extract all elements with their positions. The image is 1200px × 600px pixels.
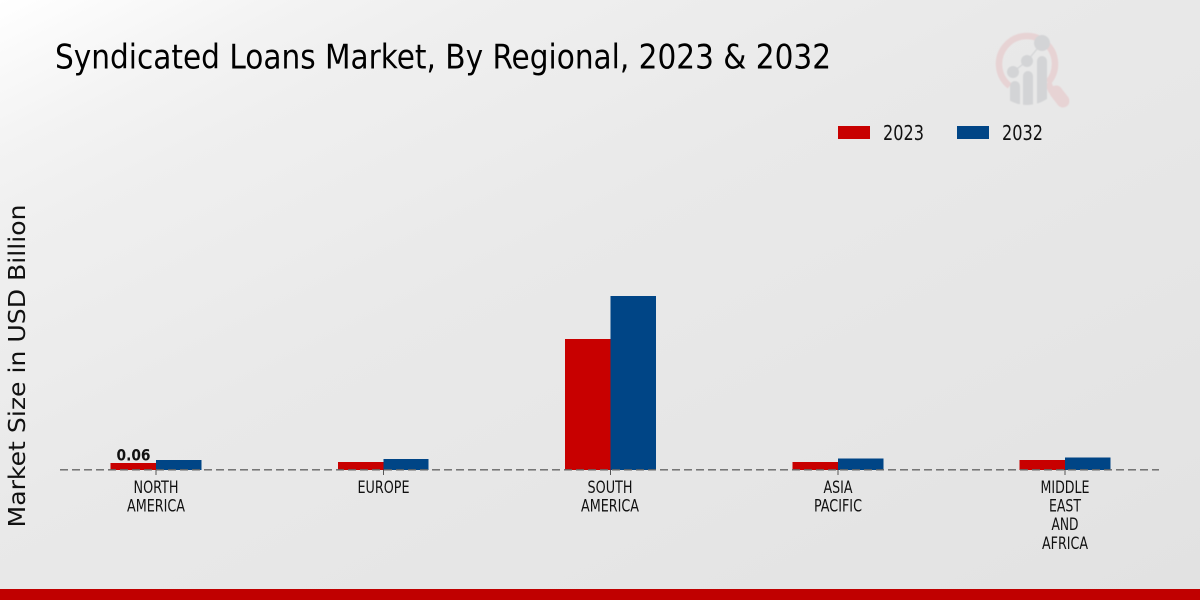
label: Middle East and Africa: EAST xyxy=(1049,496,1082,516)
y axis title: Market Size in USD Billion xyxy=(3,205,31,527)
label: North America: NORTH xyxy=(134,478,178,497)
label: Middle East and Africa: MIDDLE xyxy=(1040,478,1090,497)
bars: South America xyxy=(565,296,656,470)
bars: Asia Pacific xyxy=(792,458,884,470)
label: North America: AMERICA xyxy=(127,496,186,516)
bar chart xyxy=(60,296,1159,475)
title: Syndicated Loans Market, By Regional, 2023 & 2032 xyxy=(55,38,831,78)
x axis labels xyxy=(127,478,1090,553)
label: South America: SOUTH xyxy=(588,478,632,497)
legend item: 2032: 2032 xyxy=(1002,121,1043,145)
label: Europe: EUROPE xyxy=(358,478,410,497)
label: Asia Pacific: PACIFIC xyxy=(814,496,862,516)
label: Middle East and Africa: AND xyxy=(1052,515,1078,534)
legend xyxy=(838,121,1043,145)
legend item: 2023: 2023 xyxy=(883,121,924,145)
legend item: 2023 xyxy=(838,121,924,145)
label: Middle East and Africa: AFRICA xyxy=(1042,534,1089,553)
bars: Middle East and Africa xyxy=(1020,458,1110,470)
legend item: 2032 xyxy=(957,121,1043,145)
bars: North America xyxy=(110,460,202,470)
value label: 0.06: 0.06 xyxy=(116,446,150,464)
x axis baseline xyxy=(60,469,1159,471)
label: North America xyxy=(127,478,186,516)
label: Asia Pacific xyxy=(814,478,862,516)
label: Middle East and Africa xyxy=(1040,478,1090,553)
footer bar xyxy=(0,589,1200,600)
bars: Europe xyxy=(338,459,428,470)
label: South America xyxy=(581,478,640,516)
icon: watermark logo xyxy=(999,35,1063,105)
label: Asia Pacific: ASIA xyxy=(824,478,853,497)
label: South America: AMERICA xyxy=(581,496,640,516)
